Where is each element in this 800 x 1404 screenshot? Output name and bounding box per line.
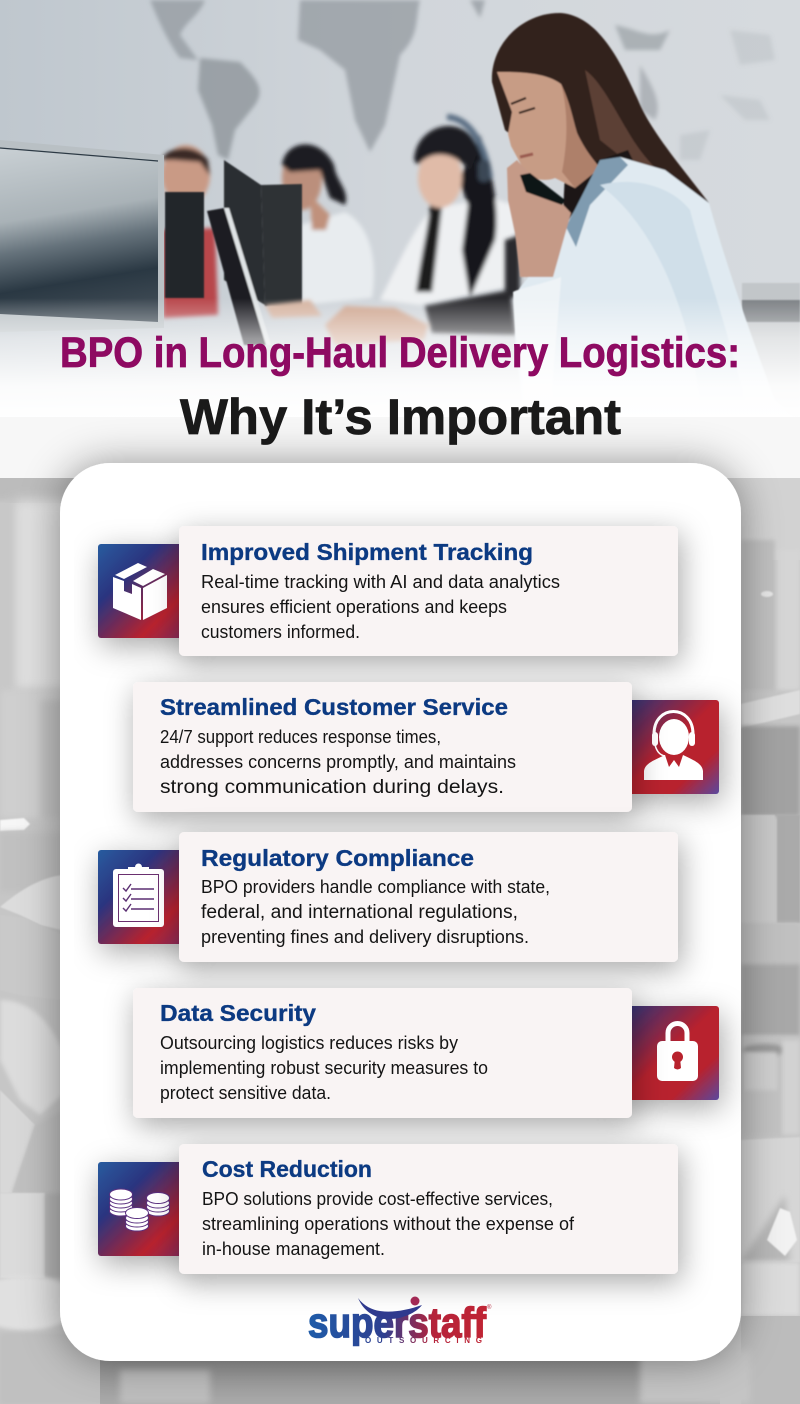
icon: checklist clipboard xyxy=(113,864,164,927)
world map on wall xyxy=(150,0,775,160)
card background xyxy=(179,526,678,656)
bottom strip xyxy=(100,1350,750,1404)
body text: streamlining operations without the expense of xyxy=(202,1214,575,1234)
heading: Cost Reduction xyxy=(202,1156,372,1182)
panel: regulatory compliance xyxy=(98,832,678,962)
logo wordmark: superstaff xyxy=(308,1299,487,1346)
desk hands and dark arm xyxy=(265,235,520,345)
logo tagline: OUTSOURCING xyxy=(365,1336,482,1345)
desk monitors xyxy=(165,160,302,345)
logo swoosh xyxy=(358,1298,422,1319)
lower grayscale background photo xyxy=(0,478,800,1404)
heading: Improved Shipment Tracking xyxy=(201,539,533,565)
logo: superstaff outsourcing xyxy=(308,1296,492,1346)
heading: Streamlined Customer Service xyxy=(160,694,508,720)
card background xyxy=(179,1144,678,1274)
panel: data security xyxy=(133,988,719,1118)
fade to white xyxy=(0,298,800,420)
second woman on phone xyxy=(282,144,374,305)
main white panel xyxy=(60,463,741,1361)
base tone xyxy=(0,478,800,1404)
card background xyxy=(133,682,632,812)
large foreground monitor xyxy=(0,140,164,332)
body text: customers informed. xyxy=(201,622,360,642)
icon: agent with headset xyxy=(644,712,703,780)
body text: in-house management. xyxy=(202,1239,385,1259)
icon: package xyxy=(113,563,167,620)
body text: strong communication during delays. xyxy=(160,777,504,798)
icon tile: headset agent xyxy=(620,700,719,794)
body text: BPO providers handle compliance with state, xyxy=(201,877,550,897)
body text: federal, and international regulations, xyxy=(201,902,518,923)
body text xyxy=(202,1189,575,1259)
body text: implementing robust security measures to xyxy=(160,1058,488,1078)
panel: cost reduction xyxy=(98,1144,678,1274)
heading: Regulatory Compliance xyxy=(201,845,474,871)
card background xyxy=(179,832,678,962)
logo dot xyxy=(410,1296,420,1306)
right strip xyxy=(727,478,800,1404)
man behind monitor xyxy=(162,145,218,318)
body text: preventing fines and delivery disruptions. xyxy=(201,927,529,947)
body text xyxy=(160,727,516,798)
third woman with headset xyxy=(380,117,517,305)
body text: ensures efficient operations and keeps xyxy=(201,597,507,617)
registered mark: ® xyxy=(487,1304,492,1311)
left strip xyxy=(0,478,72,1330)
body text: Real-time tracking with AI and data analytics xyxy=(201,572,560,592)
icon tile: box xyxy=(98,544,193,638)
main woman on the phone xyxy=(490,12,762,368)
body text: protect sensitive data. xyxy=(160,1083,331,1103)
body text: Outsourcing logistics reduces risks by xyxy=(160,1033,458,1053)
body text xyxy=(201,572,560,642)
body text xyxy=(201,877,550,947)
title line one: BPO in Long-Haul Delivery Logistics: xyxy=(60,329,740,377)
body text: 24/7 support reduces response times, xyxy=(160,727,441,747)
icon: padlock xyxy=(657,1024,698,1081)
band under the title xyxy=(0,417,800,478)
body text: BPO solutions provide cost-effective services, xyxy=(202,1189,553,1209)
icon tile: clipboard xyxy=(98,850,193,944)
icon tile: padlock xyxy=(620,1006,719,1100)
body text: addresses concerns promptly, and maintains xyxy=(160,752,516,772)
header photo: call centre team in front of a world map xyxy=(0,0,800,420)
panel: improved shipment tracking xyxy=(98,526,678,656)
table at far right xyxy=(741,283,800,346)
title line two: Why It’s Important xyxy=(180,389,621,445)
body text xyxy=(160,1033,488,1103)
heading: Data Security xyxy=(160,1000,316,1026)
card background xyxy=(133,988,632,1118)
panel: streamlined customer service xyxy=(133,682,719,812)
title xyxy=(60,329,740,445)
icon tile: coins xyxy=(98,1162,193,1256)
icon: coin stacks xyxy=(110,1189,170,1231)
